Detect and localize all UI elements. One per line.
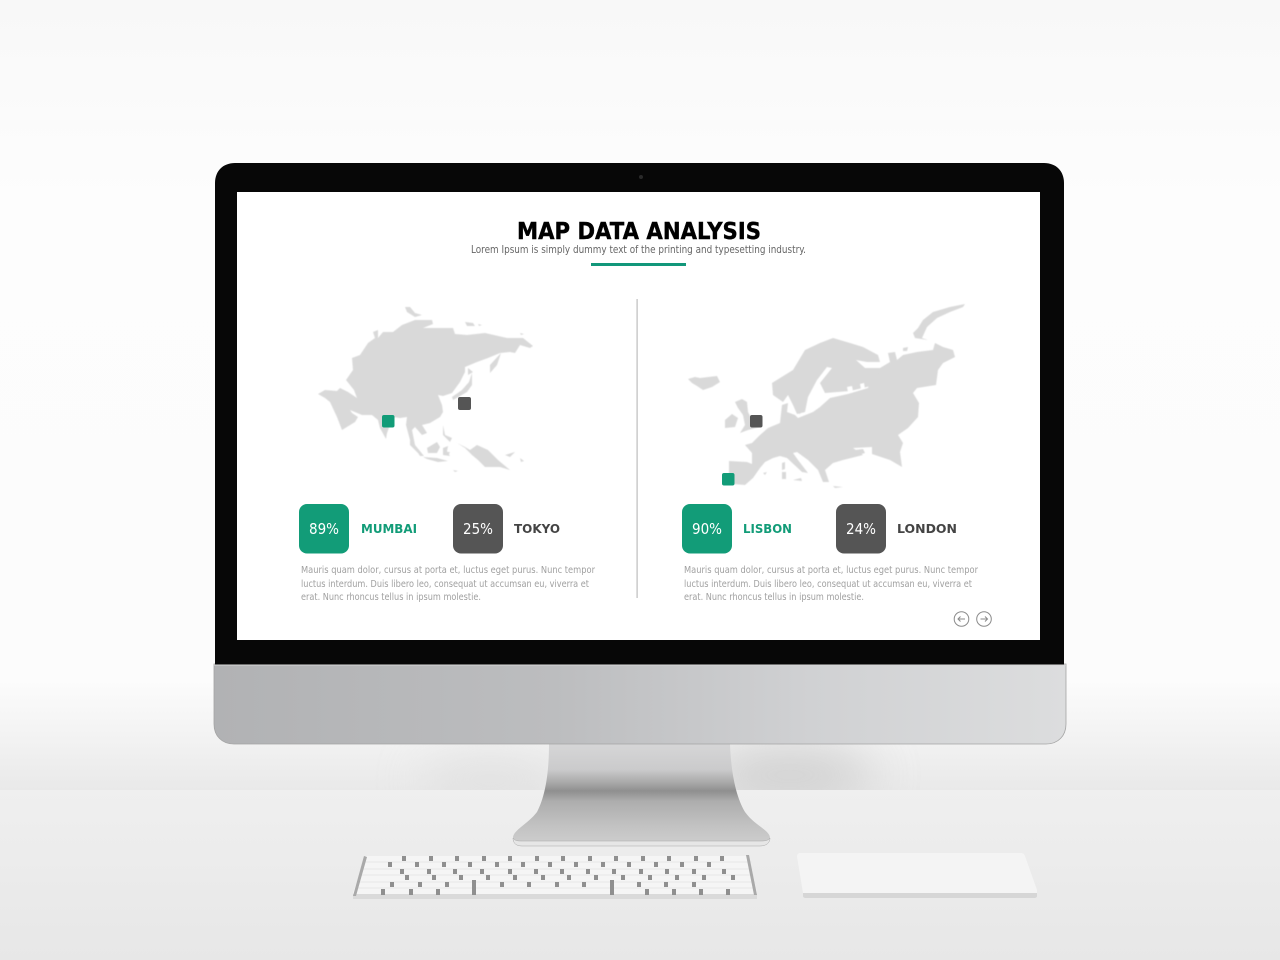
marker: Mumbai — [382, 415, 394, 428]
map: Europe — [688, 304, 965, 488]
stat: Lisbon: 90% — [692, 520, 722, 538]
stat: Tokyo: TOKYO — [514, 521, 560, 536]
stat: London: 24% — [846, 520, 876, 538]
slide screen — [237, 192, 1040, 640]
stat: Mumbai: 89% — [309, 520, 339, 538]
subtitle: Lorem Ipsum is simply dummy text of the printing and typesetting industry. — [471, 244, 806, 256]
monitor bezel — [214, 163, 1066, 666]
centre divider — [636, 299, 638, 598]
stat: Tokyo: 25% — [463, 520, 493, 538]
monitor stand — [513, 744, 770, 846]
stat: Lisbon — [682, 504, 792, 554]
body text: left: luctus interdum. Duis libero leo, consequat ut accumsan eu, viverra et — [301, 579, 589, 590]
marker: Lisbon — [722, 473, 734, 486]
stat: London: LONDON — [897, 521, 957, 536]
stat: Lisbon: LISBON — [743, 521, 792, 536]
body text: right — [684, 565, 978, 603]
body text: right: erat. Nunc rhoncus tellus in ipsum molestie. — [684, 592, 864, 603]
icon: next arrow — [977, 612, 991, 626]
stat: Tokyo — [453, 504, 560, 554]
body text: right: Mauris quam dolor, cursus at porta et, luctus eget purus. Nunc tempor — [684, 565, 978, 576]
title underline — [591, 263, 686, 266]
keyboard — [353, 855, 757, 899]
marker: London — [750, 415, 762, 428]
body text: left — [301, 565, 595, 603]
map: Asia — [318, 307, 533, 472]
marker: Tokyo — [458, 397, 471, 410]
monitor chin — [214, 664, 1066, 744]
body text: right: luctus interdum. Duis libero leo, consequat ut accumsan eu, viverra et — [684, 579, 972, 590]
body text: left: Mauris quam dolor, cursus at porta et, luctus eget purus. Nunc tempor — [301, 565, 595, 576]
trackpad — [797, 853, 1037, 898]
stat: Mumbai: MUMBAI — [361, 521, 417, 536]
body text: left: erat. Nunc rhoncus tellus in ipsum molestie. — [301, 592, 481, 603]
icon: previous arrow — [954, 612, 969, 626]
stat: London — [836, 504, 957, 554]
stat: Mumbai — [299, 504, 417, 554]
title: MAP DATA ANALYSIS — [517, 219, 761, 245]
